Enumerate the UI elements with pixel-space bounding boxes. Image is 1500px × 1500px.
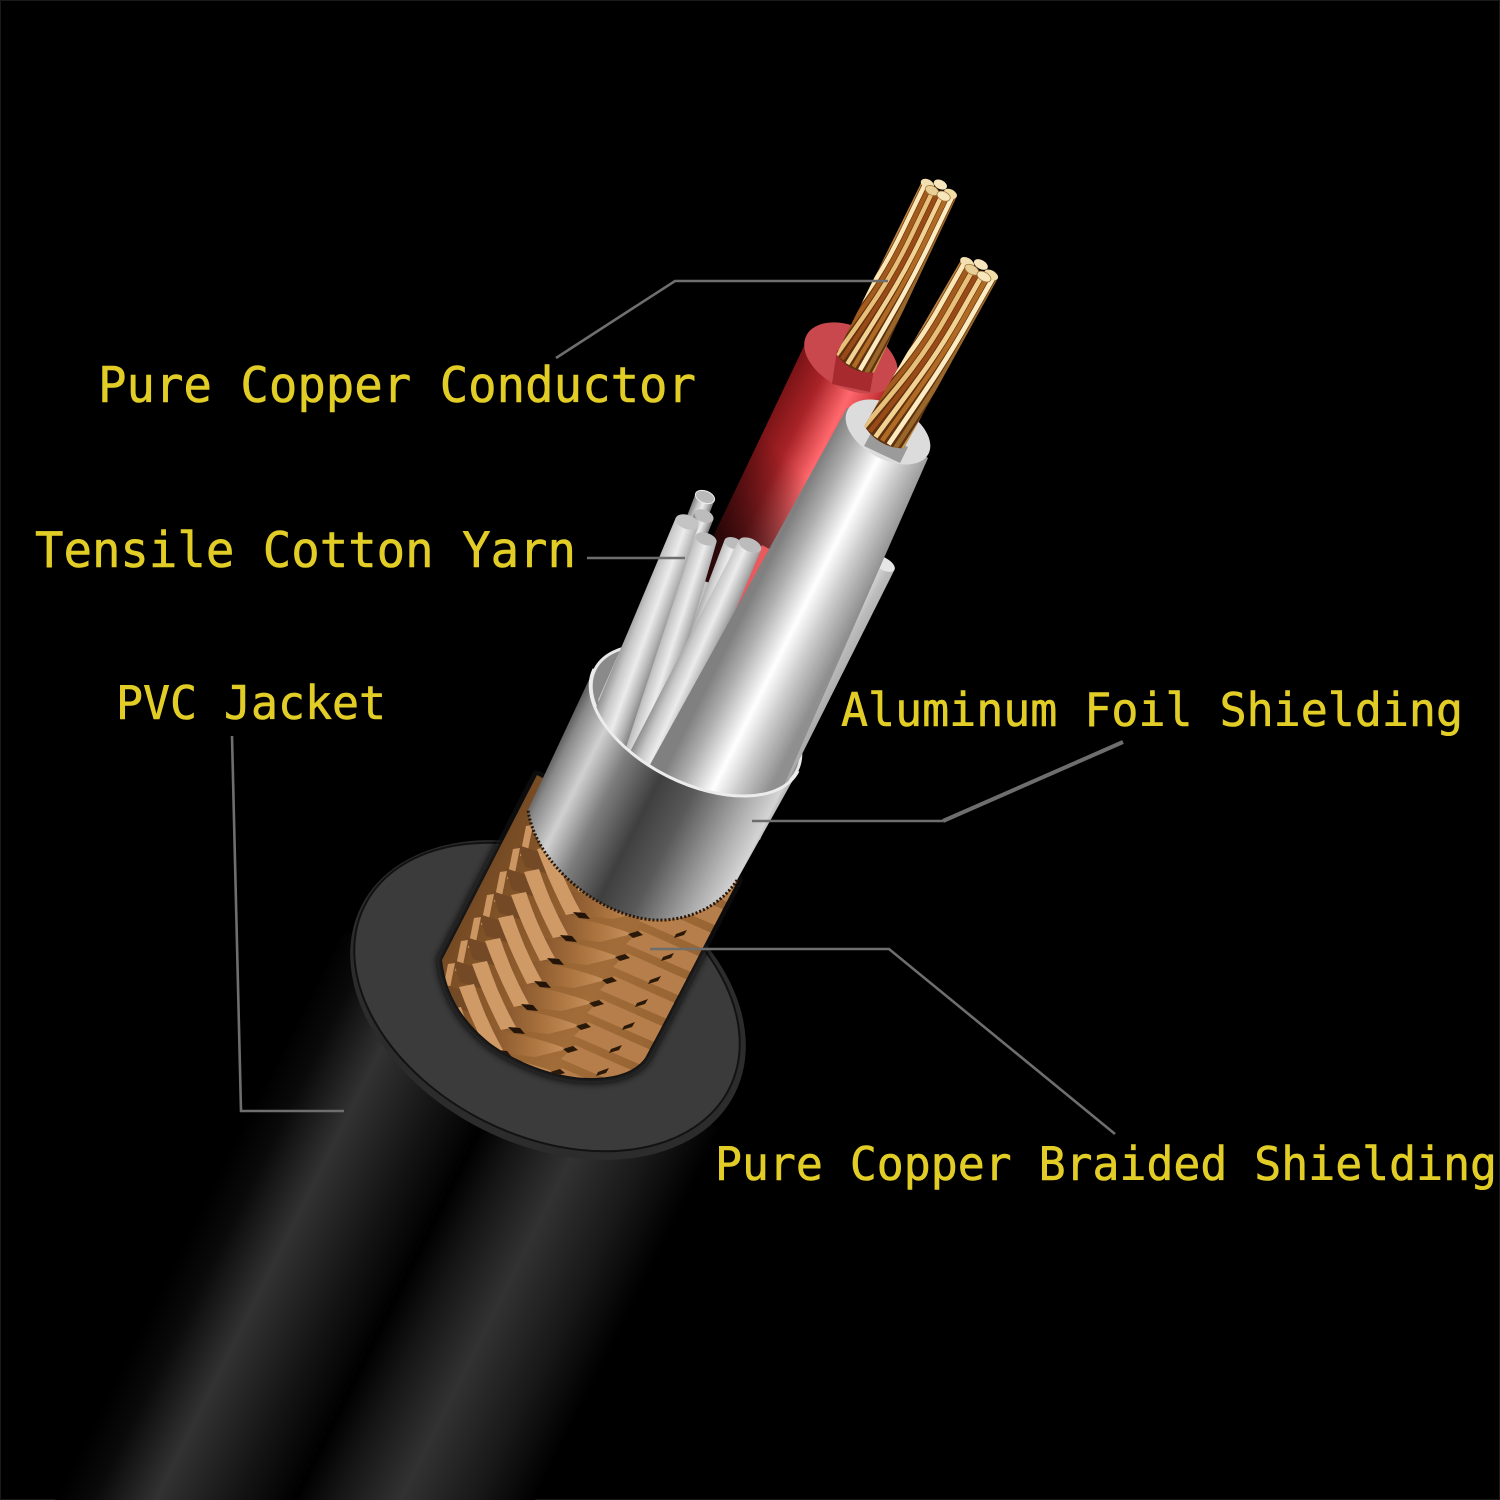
leader lines: [232, 281, 1123, 1134]
leader: jacket: [232, 736, 344, 1111]
label: Aluminum Foil Shielding: Aluminum Foil Shielding: [841, 683, 1463, 737]
foil drain strip: [727, 548, 910, 821]
aluminum foil shield: [528, 669, 798, 920]
copper conductor, white core: [836, 238, 1008, 463]
PVC jacket body: [55, 930, 722, 1500]
PVC jacket end flange: [296, 775, 800, 1223]
label: Pure Copper Braided Shielding: Pure Copper Braided Shielding: [715, 1137, 1497, 1191]
red insulated core: [640, 308, 910, 740]
copper conductor, red core: [810, 162, 966, 387]
label: Pure Copper Conductor: Pure Copper Conductor: [98, 357, 696, 414]
leader: yarn: [587, 557, 685, 559]
leader: foil: [752, 820, 943, 822]
leader: conductor: [556, 281, 888, 358]
back rim of aluminum foil: [567, 614, 825, 826]
tensile cotton yarn: [571, 488, 768, 800]
leader: braid: [650, 949, 1115, 1134]
braided copper shielding: [442, 775, 738, 1078]
leader: foil, outer segment: [943, 742, 1123, 821]
white insulated core: [636, 386, 941, 840]
label: Tensile Cotton Yarn: Tensile Cotton Yarn: [35, 522, 576, 579]
label: PVC Jacket: PVC Jacket: [116, 676, 386, 730]
illustration: cable cross-section: [55, 162, 1008, 1500]
